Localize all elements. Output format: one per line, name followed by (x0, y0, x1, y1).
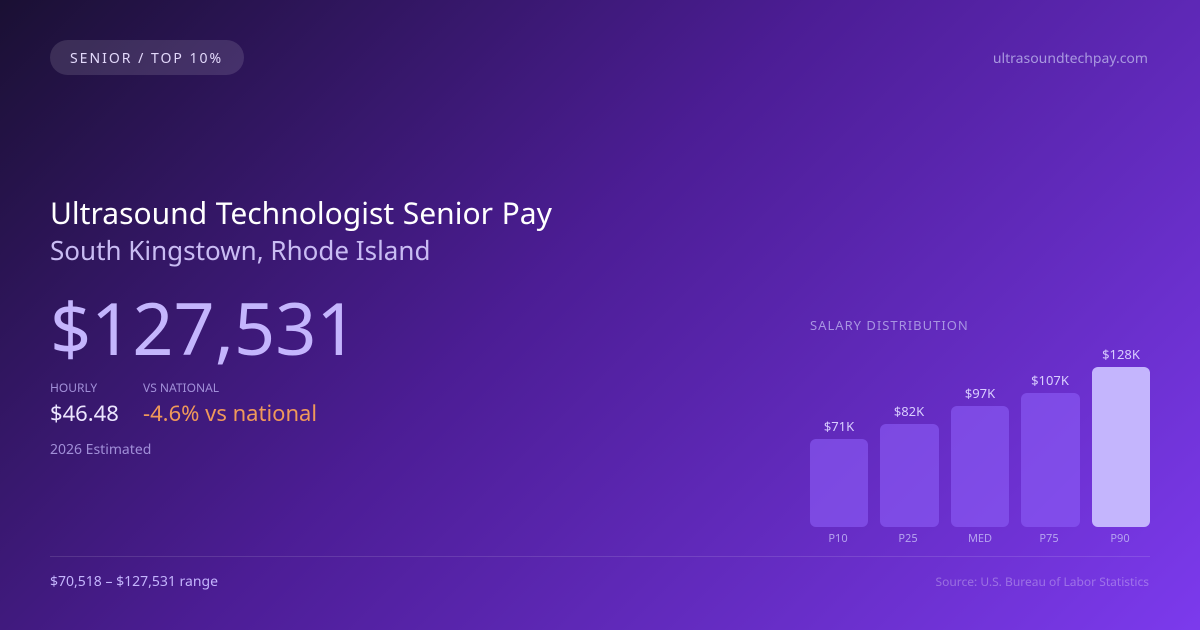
bar P75: $107K (1031, 371, 1069, 389)
bar P90 (1092, 345, 1150, 546)
badge: senior / top 10%: SENIOR / TOP 10% (70, 49, 223, 68)
bar P75 (1021, 371, 1080, 546)
chart heading: SALARY DISTRIBUTION (810, 316, 969, 334)
stat: vs national: VS NATIONAL (143, 379, 219, 396)
website url: ultrasoundtechpay.com (993, 49, 1148, 68)
bar median: MED (968, 531, 992, 546)
title: Ultrasound Technologist Senior Pay (50, 192, 552, 233)
bar P10: $71K (824, 417, 854, 435)
stat: vs national: -4.6% vs national (143, 398, 317, 428)
bar median (951, 384, 1009, 546)
badge: senior / top 10% (50, 40, 244, 75)
bar P25: $82K (894, 402, 924, 420)
bar P10 (810, 417, 868, 546)
stat: hourly: HOURLY (50, 379, 97, 396)
source: Source: U.S. Bureau of Labor Statistics (936, 573, 1149, 590)
bar P25: P25 (898, 531, 918, 546)
salary figure: $127,531 (50, 279, 358, 377)
stat: hourly (50, 379, 119, 428)
salary distribution chart (810, 316, 1150, 546)
stat: hourly: $46.48 (50, 398, 119, 428)
salary range: $70,518 – $127,531 range (50, 572, 218, 591)
bar P10: P10 (828, 531, 848, 546)
stat: vs national (143, 379, 317, 428)
bar P90: $128K (1102, 345, 1140, 363)
bar median: $97K (965, 384, 995, 402)
estimate note: 2026 Estimated (50, 440, 151, 459)
bar P75: P75 (1039, 531, 1059, 546)
subtitle: location: South Kingstown, Rhode Island (50, 232, 430, 268)
bar P25 (880, 402, 939, 546)
bar P90: P90 (1110, 531, 1130, 546)
